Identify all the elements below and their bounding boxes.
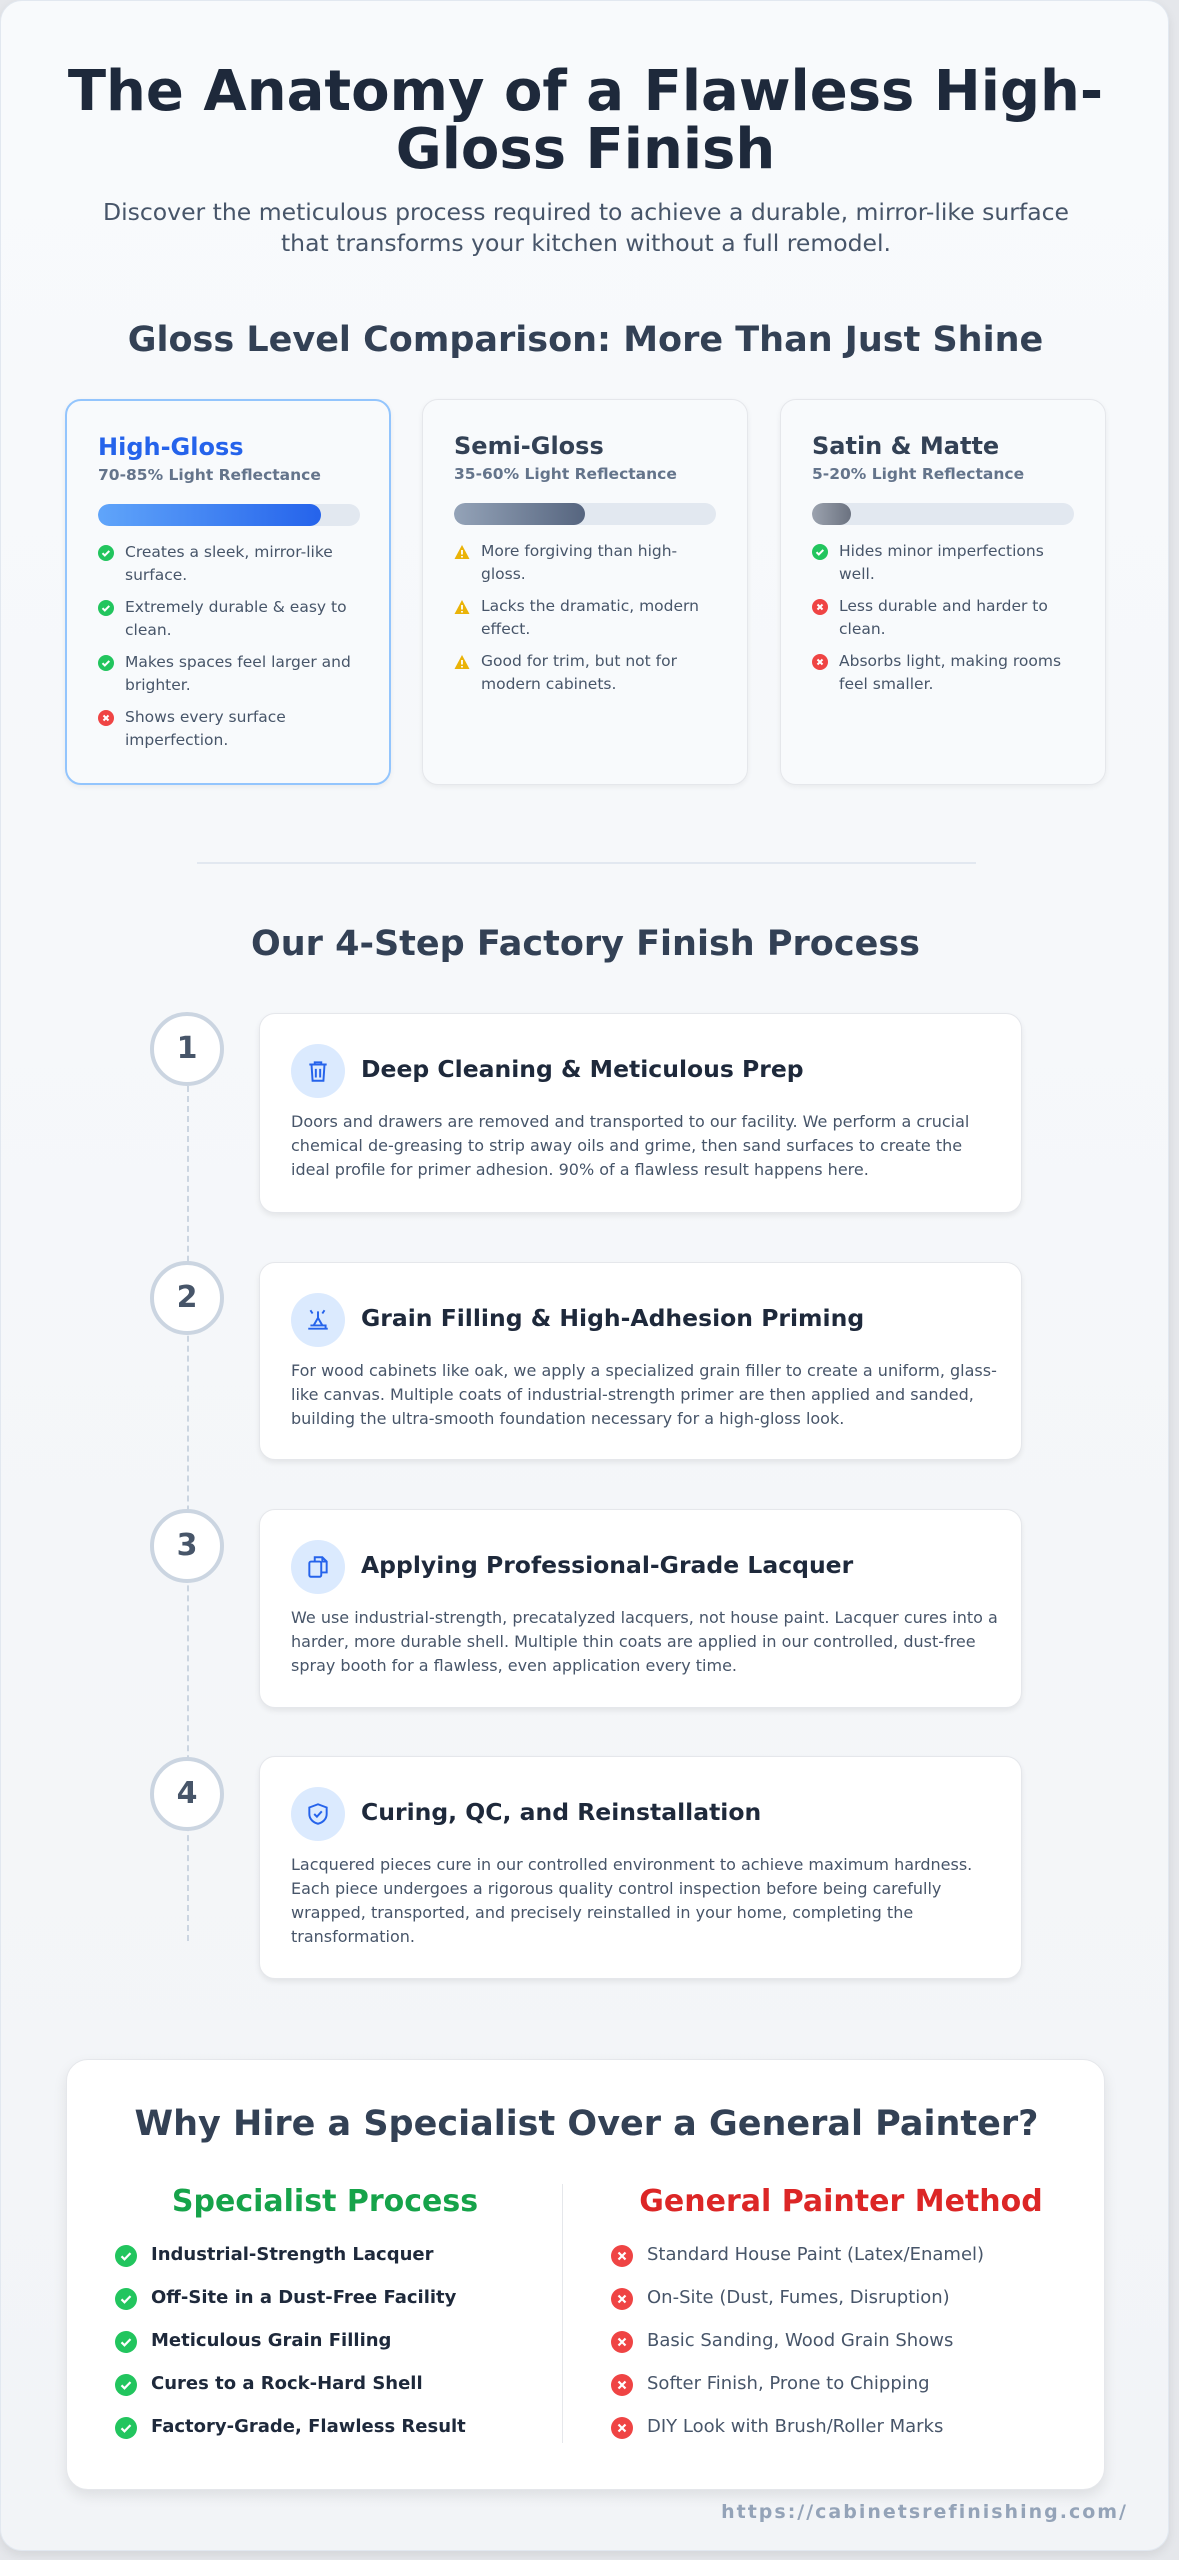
list: high gloss: Shows every surface imperfection.: [125, 708, 286, 749]
step 2 number: 2: [177, 1280, 197, 1315]
step 4 number: 4: [177, 1776, 197, 1811]
step 4 card: [259, 1756, 1022, 1979]
step 3 card: [259, 1509, 1022, 1708]
column: specialist: Off-Site in a Dust-Free Facility: [151, 2287, 456, 2308]
icon: shield: [291, 1787, 345, 1841]
column: general painter: General Painter Method: [639, 2184, 1043, 2219]
column: general painter: Softer Finish, Prone to Chipping: [647, 2373, 930, 2394]
list: high gloss: Makes spaces feel larger and brighter.: [125, 653, 351, 694]
card: high-gloss: 70-85% Light Reflectance: [98, 466, 321, 484]
step 2 number: [150, 1261, 224, 1335]
step 3 card: We use industrial-strength, precatalyzed lacquers, not house paint. Lacquer cures into a harder, more durable shell. Multiple thin coats are applied in our controlled, dust-free spray booth for a flawless, even application every time.: [291, 1608, 998, 1675]
step 4 card: Curing, QC, and Reinstallation: [361, 1798, 761, 1826]
icon: trash: [291, 1044, 345, 1098]
list: semi gloss: [454, 542, 699, 693]
icon: brush: [291, 1293, 345, 1347]
card: semi-gloss: Semi-Gloss: [454, 432, 604, 460]
column: specialist: Specialist Process: [172, 2184, 478, 2219]
list: high gloss: Creates a sleek, mirror-like surface.: [125, 543, 333, 584]
column: general painter: Basic Sanding, Wood Grain Shows: [647, 2330, 953, 2351]
column: general painter: DIY Look with Brush/Roller Marks: [647, 2416, 943, 2437]
list: satin: Less durable and harder to clean.: [839, 597, 1048, 638]
bar: satin: [812, 503, 1074, 525]
step 1 number: 1: [177, 1031, 197, 1066]
list: semi gloss: Lacks the dramatic, modern effect.: [481, 597, 699, 638]
list: satin: Hides minor imperfections well.: [839, 542, 1044, 583]
bar: semi gloss: [454, 503, 716, 525]
heading: process: Our 4-Step Factory Finish Process: [251, 924, 920, 964]
list: high gloss: [98, 543, 351, 749]
column: specialist: Cures to a Rock-Hard Shell: [151, 2373, 423, 2394]
step 3 card: Applying Professional-Grade Lacquer: [361, 1551, 853, 1579]
step 1 card: [259, 1013, 1022, 1213]
list: satin: [812, 542, 1061, 693]
column: general painter: Standard House Paint (Latex/Enamel): [647, 2244, 984, 2265]
column: specialist: Industrial-Strength Lacquer: [151, 2244, 433, 2265]
step 1 card: Deep Cleaning & Meticulous Prep: [361, 1055, 804, 1083]
step 2 card: For wood cabinets like oak, we apply a specialized grain filler to create a uniform, glass-like canvas. Multiple coats of industrial-strength primer are then applied and sanded, building the ultra-smooth foundation necessary for a high-gloss look.: [291, 1361, 997, 1428]
card: high-gloss: High-Gloss: [98, 433, 244, 461]
title: The Anatomy of a Flawless High-: [68, 59, 1103, 124]
step 1 number: [150, 1012, 224, 1086]
subtitle: Discover the meticulous process required to achieve a durable, mirror-like surface that transforms your kitchen without a full remodel.: [103, 198, 1069, 257]
step 1 card: Doors and drawers are removed and transported to our facility. We perform a crucial chemical de-greasing to strip away oils and grime, then sand surfaces to create the ideal profile for primer adhesion. 90% of a flawless result happens here.: [291, 1112, 969, 1179]
column: specialist: [115, 2184, 478, 2439]
heading: gloss comparison: Gloss Level Comparison: More Than Just Shine: [128, 320, 1043, 360]
list: high gloss: Extremely durable & easy to clean.: [125, 598, 347, 639]
column: specialist: Factory-Grade, Flawless Result: [151, 2416, 466, 2437]
title: Gloss Finish: [396, 117, 775, 182]
icon: clipboard: [291, 1540, 345, 1594]
card: semi-gloss: 35-60% Light Reflectance: [454, 465, 677, 483]
column: specialist: Meticulous Grain Filling: [151, 2330, 391, 2351]
column: general painter: [611, 2184, 1043, 2439]
title: [68, 59, 1103, 182]
card: satin & matte: [780, 399, 1106, 785]
card: satin & matte: 5-20% Light Reflectance: [812, 465, 1024, 483]
list: satin: Absorbs light, making rooms feel smaller.: [839, 652, 1061, 693]
list: semi gloss: More forgiving than high-gloss.: [481, 542, 677, 583]
footer url: https://cabinetsrefinishing.com/: [721, 2501, 1128, 2523]
bar: high gloss: [98, 504, 360, 526]
panel: specialist vs painter: [66, 2059, 1105, 2490]
step 4 card: Lacquered pieces cure in our controlled environment to achieve maximum hardness. Each piece undergoes a rigorous quality control inspection before being carefully wrapped, transported, and precisely reinstalled in your home, completing the transformation.: [291, 1855, 972, 1946]
list: semi gloss: Good for trim, but not for modern cabinets.: [481, 652, 677, 693]
card: high-gloss: [65, 399, 391, 785]
card: semi-gloss: [422, 399, 748, 785]
card: satin & matte: Satin & Matte: [812, 432, 999, 460]
step 4 number: [150, 1757, 224, 1831]
step 2 card: Grain Filling & High-Adhesion Priming: [361, 1304, 864, 1332]
step 3 number: [150, 1509, 224, 1583]
comparison title: Why Hire a Specialist Over a General Painter?: [135, 2104, 1038, 2144]
step 2 card: [259, 1262, 1022, 1460]
column: general painter: On-Site (Dust, Fumes, Disruption): [647, 2287, 950, 2308]
step 3 number: 3: [177, 1528, 197, 1563]
